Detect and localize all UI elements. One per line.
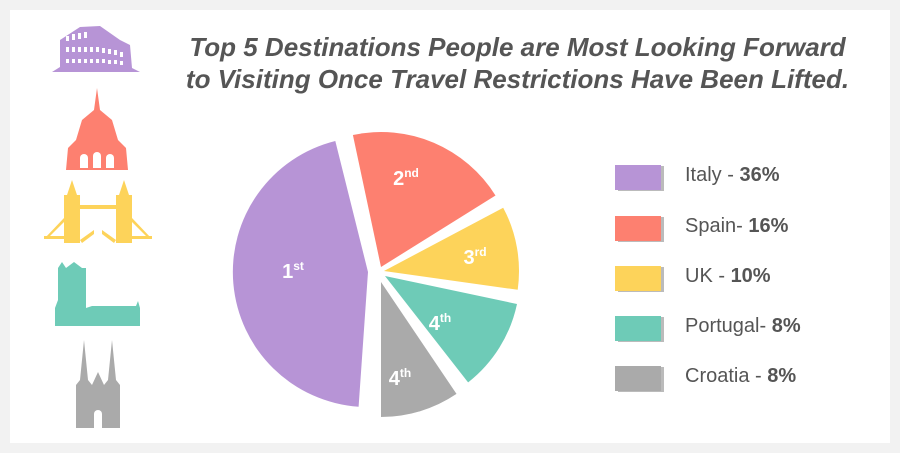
pie chart: st [293,259,304,273]
legend item: Portugal: Portugal- 8% [685,315,801,337]
icon: colosseum [52,26,140,72]
icon: tower bridge [44,180,152,243]
slice: Portugal [385,276,517,382]
legend item: Portugal [615,315,801,342]
title [186,32,849,94]
title: to Visiting Once Travel Restrictions Have Been Lifted. [186,64,849,94]
legend item: Croatia: Croatia - 8% [685,365,796,387]
pie chart: 1 [282,261,293,283]
legend item: Italy: Italy - 36% [685,164,779,186]
pie chart: 3 [463,247,475,269]
title: Top 5 Destinations People are Most Looking Forward [189,32,846,62]
icon: belem tower [55,262,140,326]
legend item: Italy [615,164,779,191]
icon: sagrada cathedral [66,88,128,170]
slice: Spain [353,132,496,267]
legend item: Spain: Spain- 16% [685,215,788,237]
pie chart: rd [475,245,487,259]
legend item: Spain [615,215,788,242]
slice: Italy [233,141,368,407]
pie chart: th [440,311,451,325]
legend item: Croatia [615,365,796,392]
icons column [44,26,152,428]
legend item: UK: UK - 10% [685,265,771,287]
pie chart: 2 [393,168,404,190]
slice: UK [384,208,519,290]
pie chart: nd [404,166,419,180]
slice: Croatia [381,282,456,417]
legend item: UK [615,265,771,292]
pie chart: 4 [389,368,400,390]
pie chart: 4 [429,313,440,335]
icon: cathedral [76,340,120,428]
pie chart: th [400,366,411,380]
